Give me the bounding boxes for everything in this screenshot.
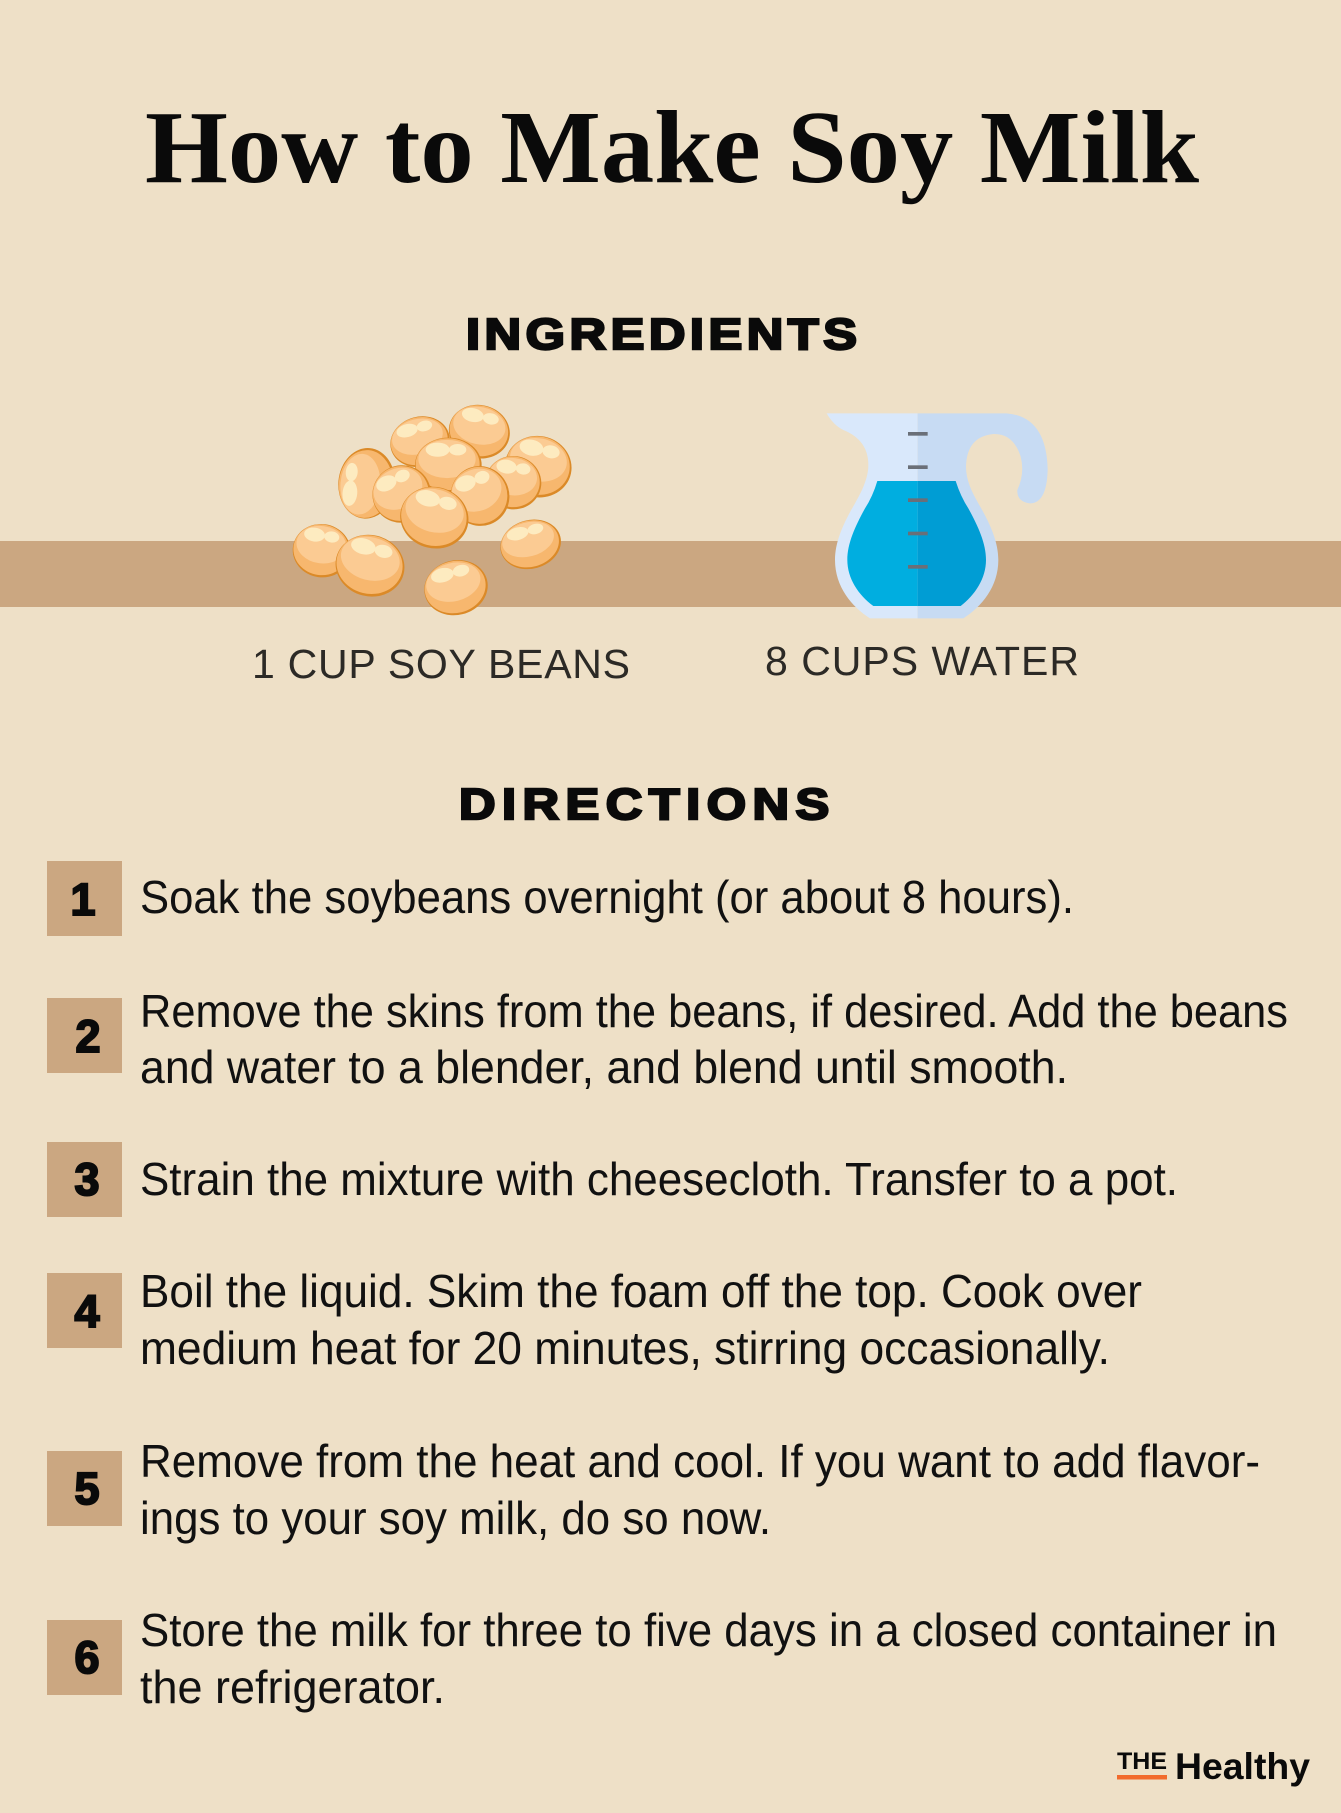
heading: directions: DIRECTIONS [459,780,829,829]
step 2: and water to a blender, and blend until smooth. [140,1041,1068,1093]
step 2: 2 [75,1011,101,1062]
logo: The Healthy: Healthy [1175,1746,1310,1787]
step 4: Boil the liquid. Skim the foam off the top. Cook over [140,1265,1142,1317]
step 3 [47,1142,1178,1217]
ingredient label: soy beans: 1 CUP SOY BEANS [252,641,630,687]
step 1: 1 [70,874,96,925]
step 6: the refrigerator. [140,1661,445,1713]
step 6 [47,1604,1277,1713]
step 5: 5 [74,1463,100,1514]
step 1 [47,861,1074,936]
step 4: 4 [74,1286,100,1337]
step 2: Remove the skins from the beans, if desired. Add the beans [140,985,1288,1037]
step 4: medium heat for 20 minutes, stirring occasionally. [140,1322,1110,1374]
logo: The Healthy [1117,1746,1310,1787]
step 6: Store the milk for three to five days in a closed container in [140,1604,1277,1656]
step 6: 6 [74,1632,100,1683]
step 2 [47,985,1288,1093]
step 4 [47,1265,1142,1374]
ingredient band [0,541,1341,607]
step 3: 3 [74,1154,100,1205]
step 3: Strain the mixture with cheesecloth. Transfer to a pot. [140,1153,1178,1205]
heading: ingredients: INGREDIENTS [466,310,857,359]
ingredient label: water: 8 CUPS WATER [765,638,1079,684]
logo: The Healthy: THE [1117,1748,1167,1775]
step 5: ings to your soy milk, do so now. [140,1492,771,1544]
step 5 [47,1435,1260,1544]
icon: water pitcher [827,413,1048,618]
icon: soy beans [289,399,577,622]
title: How to Make Soy Milk [145,90,1199,205]
step 1: Soak the soybeans overnight (or about 8 hours). [140,871,1074,923]
step 5: Remove from the heat and cool. If you want to add flavor- [140,1435,1260,1487]
